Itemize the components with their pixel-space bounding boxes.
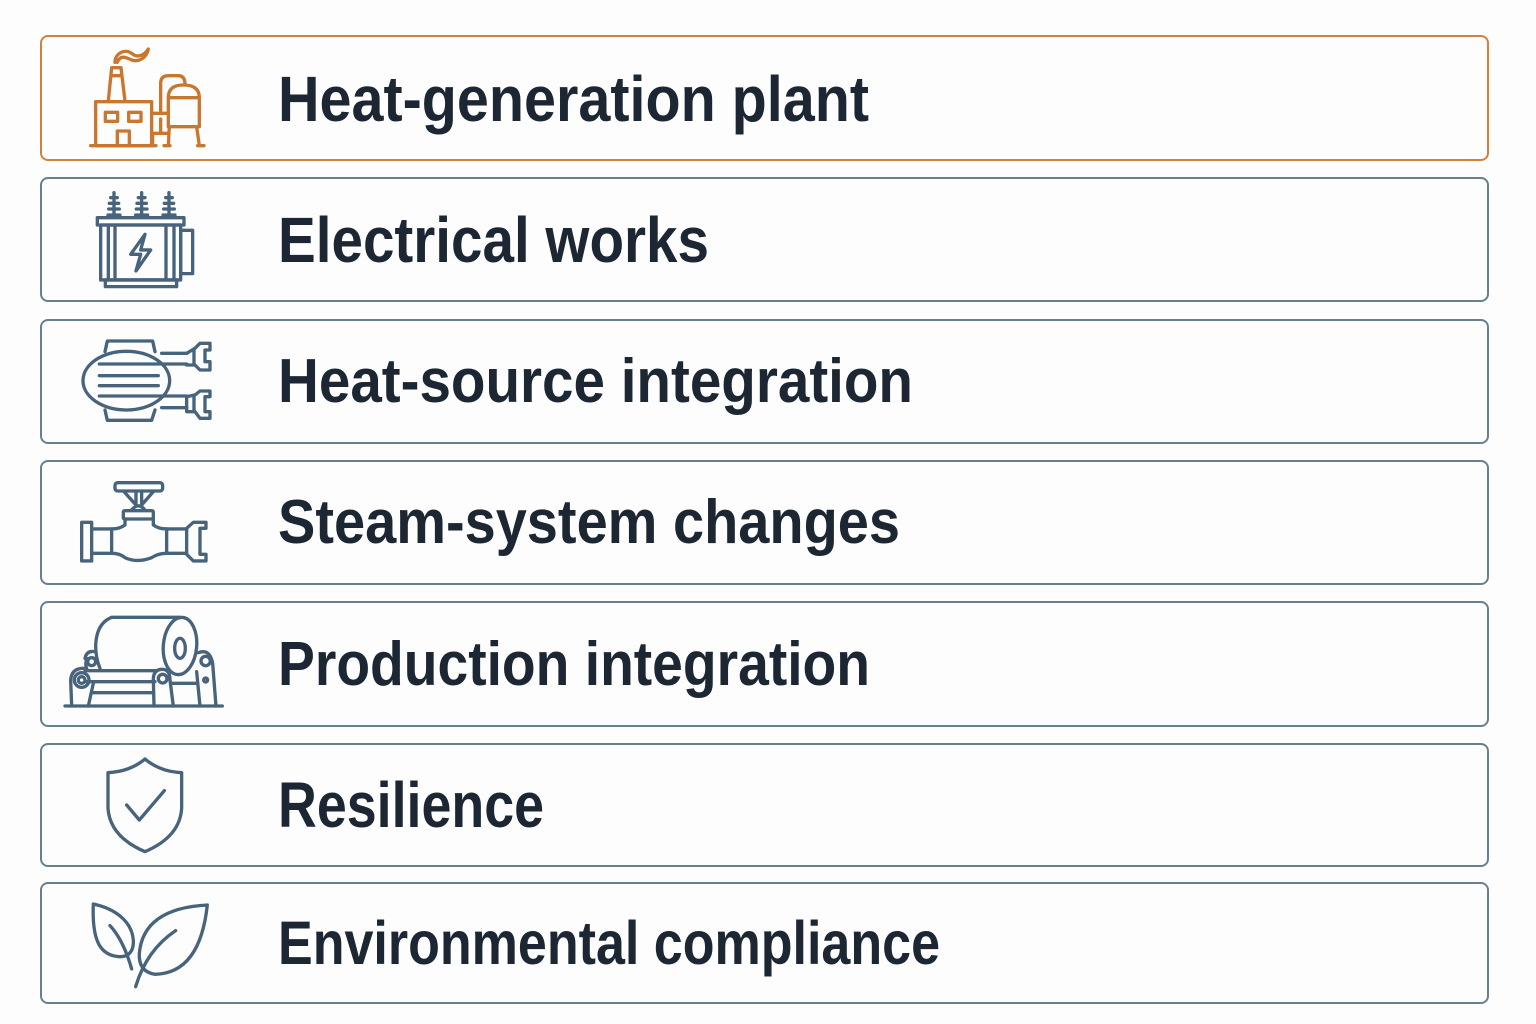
panel: steam-system changes bbox=[41, 461, 1488, 584]
label: resilience: Resilience bbox=[278, 769, 544, 841]
label: environmental compliance: Environmental compliance bbox=[278, 909, 940, 977]
panel: environmental compliance bbox=[41, 883, 1488, 1003]
panel: electrical works bbox=[41, 178, 1488, 301]
panel: resilience bbox=[41, 744, 1488, 866]
label: heat-source integration: Heat-source integration bbox=[278, 347, 913, 416]
panel: heat-generation plant bbox=[41, 36, 1488, 160]
icon: paper roll machine bbox=[65, 616, 222, 706]
icon: heat exchanger with pipe flanges bbox=[83, 341, 210, 420]
icon: transformer with lightning bolt bbox=[97, 193, 193, 287]
icon: factory with chimney and tank bbox=[91, 49, 204, 146]
label: heat-generation plant: Heat-generation plant bbox=[278, 63, 869, 135]
label: production integration: Production integration bbox=[278, 630, 870, 699]
icon: two leaves bbox=[93, 904, 207, 987]
icon: shield with check mark bbox=[108, 759, 182, 852]
label: electrical works: Electrical works bbox=[278, 204, 709, 276]
label: steam-system changes: Steam-system changes bbox=[278, 488, 900, 557]
icon: steam valve bbox=[82, 483, 206, 561]
panel: heat-source integration bbox=[41, 320, 1488, 443]
panel: production integration bbox=[41, 602, 1488, 726]
